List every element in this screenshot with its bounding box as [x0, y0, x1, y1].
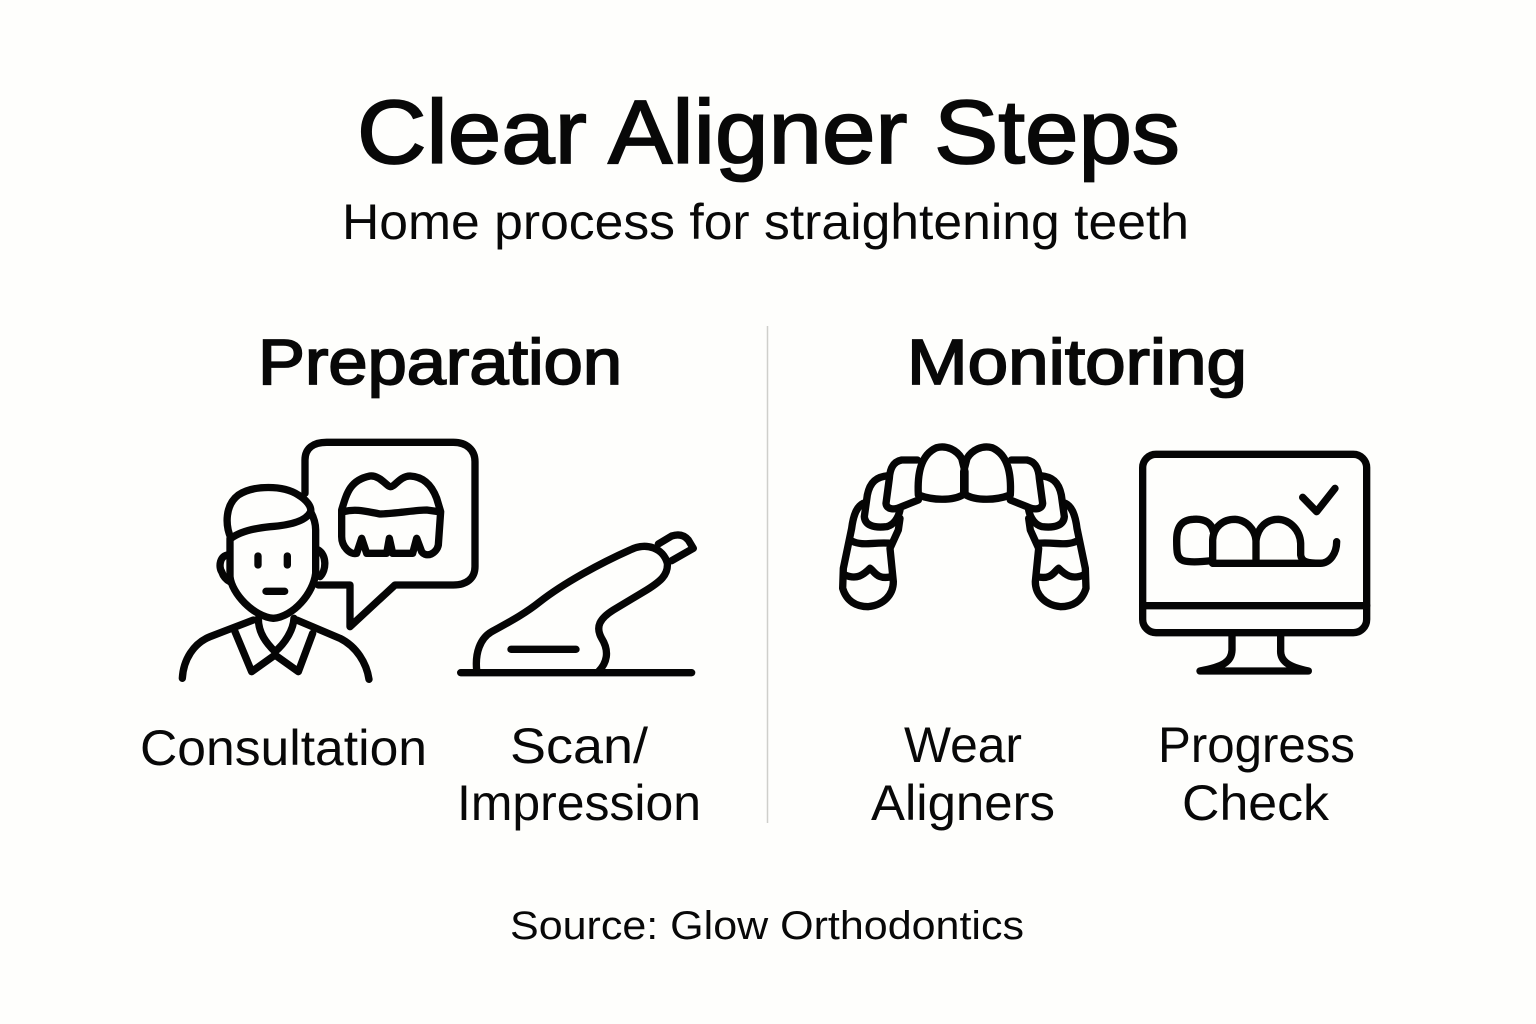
icon: intraoral scanner — [461, 535, 693, 673]
heading: monitoring: Monitoring — [907, 326, 1247, 398]
subtitle: Home process for straightening teeth — [342, 194, 1189, 250]
label: progress check — [1158, 717, 1355, 831]
title: Clear Aligner Steps — [357, 83, 1180, 183]
icon: consultation person with speech bubble — [182, 442, 475, 679]
label: wear aligners — [871, 717, 1055, 831]
label: scan / impression — [457, 718, 701, 831]
label: wear aligners: Wear — [904, 717, 1022, 773]
icon: monitor with teeth and check mark — [1143, 454, 1367, 671]
heading: preparation: Preparation — [258, 326, 622, 398]
label: wear aligners: Aligners — [871, 775, 1055, 831]
label: progress check: Check — [1182, 775, 1330, 831]
label: scan / impression: Scan/ — [510, 718, 648, 774]
source note: Source: Glow Orthodontics — [510, 904, 1024, 948]
label: scan / impression: Impression — [457, 775, 701, 831]
label: consultation: Consultation — [140, 720, 427, 776]
label: progress check: Progress — [1158, 717, 1355, 773]
icon: clear aligner tray — [843, 447, 1086, 607]
